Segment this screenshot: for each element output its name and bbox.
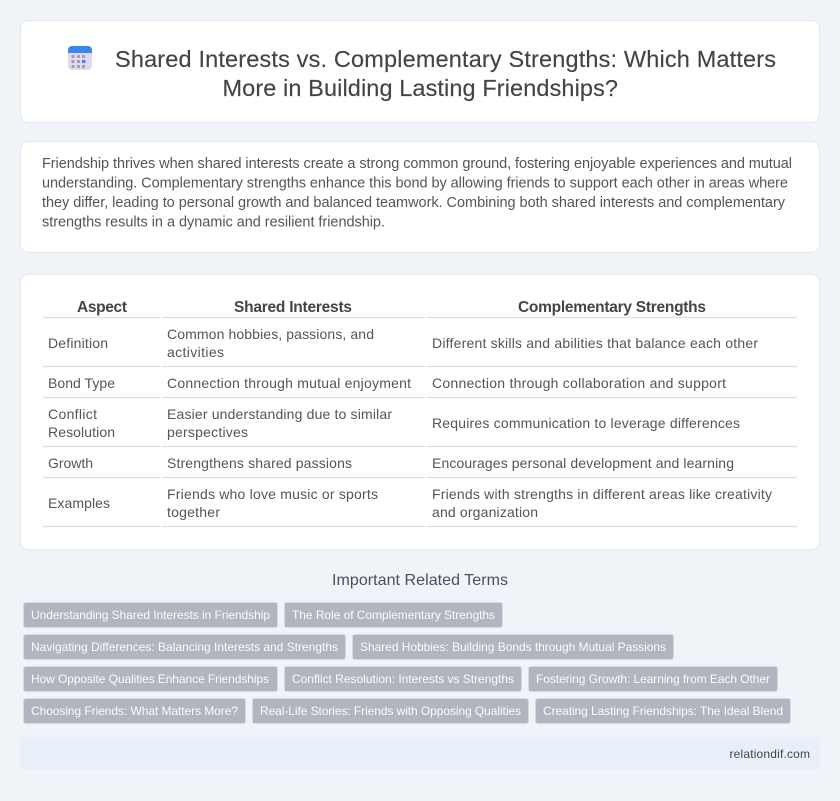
panel: comparison table <box>20 274 820 550</box>
panel: related term tags: How Opposite Qualities Enhance Friendships <box>31 672 269 686</box>
table header: Aspect <box>77 299 127 316</box>
row: definition: Common hobbies, passions, and <box>167 326 374 342</box>
panel: related term tags: Understanding Shared Interests in Friendship <box>31 608 270 622</box>
row: growth: Encourages personal development and learning <box>432 455 734 471</box>
row: examples: together <box>167 504 220 520</box>
table header: Complementary Strengths <box>518 299 706 316</box>
footer: relationdif.com <box>730 747 810 761</box>
panel: related term tags: Conflict Resolution: Interests vs Strengths <box>292 672 514 686</box>
row: definition: Different skills and abilities that balance each other <box>432 335 758 351</box>
text block: introduction paragraph: they differ, leading to personal growth and balanced teamwork. Combining both shared interests and complementary <box>42 195 786 211</box>
panel: introduction <box>20 142 820 252</box>
footer <box>20 737 820 770</box>
panel: related term tags: Navigating Differences: Balancing Interests and Strengths <box>31 640 338 654</box>
row: bond type: Connection through mutual enjoyment <box>167 375 411 391</box>
text block: introduction paragraph: Friendship thrives when shared interests create a strong common ground, fostering enjoyable experiences and mutual <box>42 156 792 172</box>
panel: related term tags: Creating Lasting Friendships: The Ideal Blend <box>543 704 783 718</box>
table header: Shared Interests <box>234 299 352 316</box>
row: bond type <box>48 375 726 391</box>
panel: related term tags <box>24 602 790 724</box>
row: conflict resolution: Requires communication to leverage differences <box>432 415 740 431</box>
row: examples: Examples <box>48 495 110 511</box>
panel: header <box>20 20 820 122</box>
row: bond type: Connection through collaboration and support <box>432 375 726 391</box>
title: More in Building Lasting Friendships? <box>222 75 618 101</box>
row: definition: activities <box>167 344 224 360</box>
row: conflict resolution: Conflict <box>48 406 97 422</box>
panel: related term tags: Choosing Friends: What Matters More? <box>31 704 238 718</box>
heading: important related terms: Important Related Terms <box>332 572 508 589</box>
panel: related term tags: The Role of Complementary Strengths <box>292 608 495 622</box>
row: examples <box>48 486 772 520</box>
panel: related term tags: Fostering Growth: Learning from Each Other <box>536 672 770 686</box>
icon: calendar <box>68 46 92 70</box>
row: conflict resolution: Easier understanding due to similar <box>167 406 392 422</box>
row: conflict resolution: Resolution <box>48 424 115 440</box>
text block: introduction paragraph: understanding. Complementary strengths enhance this bond by allowing friends to support each other in areas where <box>42 176 788 192</box>
row: definition: Definition <box>48 335 108 351</box>
row: examples: Friends who love music or sports <box>167 486 378 502</box>
row: conflict resolution <box>48 406 740 440</box>
row: growth <box>48 455 734 471</box>
panel: related term tags: Real-Life Stories: Friends with Opposing Qualities <box>260 704 521 718</box>
title: Shared Interests vs. Complementary Strengths: Which Matters <box>115 46 776 72</box>
row: growth: Strengthens shared passions <box>167 455 352 471</box>
row: examples: Friends with strengths in different areas like creativity <box>432 486 772 502</box>
text block: introduction paragraph: strengths results in a dynamic and resilient friendship. <box>42 214 385 230</box>
table header <box>77 299 706 316</box>
panel: related term tags: Shared Hobbies: Building Bonds through Mutual Passions <box>360 640 666 654</box>
text block: introduction paragraph <box>42 156 792 230</box>
title <box>115 46 776 101</box>
row: bond type: Bond Type <box>48 375 115 391</box>
row: growth: Growth <box>48 455 93 471</box>
row: definition <box>48 326 758 360</box>
row: examples: and organization <box>432 504 538 520</box>
row: conflict resolution: perspectives <box>167 424 248 440</box>
